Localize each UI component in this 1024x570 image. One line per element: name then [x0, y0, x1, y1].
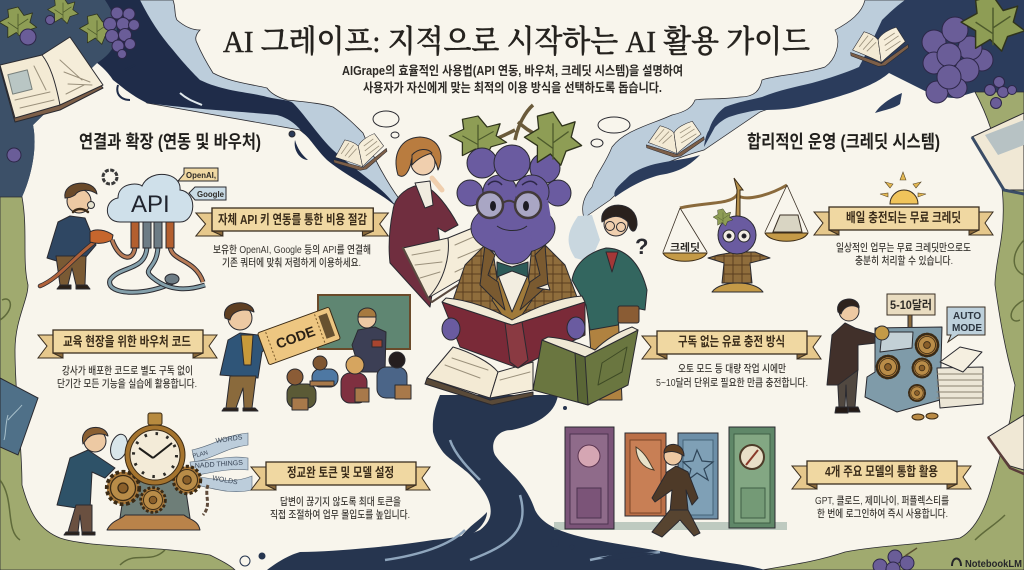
callout: OpenAI: [178, 168, 218, 181]
icon: young man with question: [572, 205, 647, 400]
icon: grape mascot head: [457, 145, 571, 264]
subtitle: AIGrape의 효율적인 사용법(API 연동, 바우처, 크레딧 시스템)을 설명하여: [342, 63, 683, 78]
banner: API key: 자체 API 키 연동를 통한 비용 절감: [218, 212, 367, 227]
icon: right leaf: [524, 112, 582, 165]
text block: tokens: 답변이 끊기지 않도록 최대 토큰을: [280, 495, 401, 508]
icon: ribbons of words: PLAN: [192, 450, 209, 460]
icon: red open book: [442, 296, 585, 368]
icon: small flying book left: [330, 132, 390, 175]
callout: auto mode: AUTO: [953, 311, 981, 322]
panel: left olive border: [0, 197, 235, 570]
icon: ribbons of words: [190, 433, 252, 492]
callout: auto mode: [947, 307, 985, 342]
text block: voucher code: 강사가 배포한 코드로 별도 구독 없이: [62, 364, 193, 377]
illustration: central characters: ?: [635, 234, 648, 259]
banner: API key: [196, 208, 388, 236]
icon: sun: [880, 172, 926, 204]
callout: 5-10 dollars sign: [887, 294, 935, 315]
callout: auto mode: MODE: [952, 323, 982, 334]
icon: API cables: [110, 222, 205, 292]
illustration: clock machine: [57, 413, 252, 535]
panel: central ink river: [240, 395, 765, 570]
icon: API cloud: API: [131, 191, 170, 218]
banner: daily free credit: [814, 207, 993, 235]
icon: coins: [912, 413, 938, 420]
illustration: paid charging machine: [827, 294, 985, 420]
illustration: scale with grape character: [663, 178, 808, 292]
icon: thought bubbles: [289, 111, 630, 147]
callout: Google: [189, 187, 226, 200]
icon: ribbons of words: WOLDS: [212, 475, 238, 486]
icon: lady reader: [389, 137, 458, 307]
icon: blue door: [678, 433, 718, 519]
illustration: central characters: [389, 105, 648, 405]
text block: paid charging: 5~10달러 단위로 필요한 만큼 충전합니다.: [656, 376, 808, 389]
icon: balance scale: [663, 178, 808, 262]
icon: OpenAI mark: [103, 170, 117, 184]
icon: ribbons of words: WORDS: [215, 434, 243, 445]
icon: ribbons of words: NADD THINGS: [195, 460, 243, 470]
icon: man with voucher: [220, 303, 270, 411]
text block: daily free credit: 일상적인 업무는 무료 크레딧만으로도: [836, 241, 971, 254]
icon: purple door: [565, 427, 614, 529]
text block: voucher code: 단기간 모든 기능을 실습에 활용합니다.: [57, 377, 197, 390]
icon: right-side book: [972, 113, 1024, 194]
icon: top-left grapes and leaves: [0, 0, 139, 59]
banner: paid charging: 구독 없는 유료 충전 방식: [678, 334, 785, 349]
icon: balance scale: 크레딧: [670, 241, 700, 254]
subtitle: [342, 63, 683, 95]
text block: tokens: 직접 조절하여 업무 몰입도를 높입니다.: [270, 508, 410, 521]
callout: Google: Google: [197, 189, 224, 199]
icon: man inserting coin: [827, 299, 878, 413]
banner: paid charging: [642, 331, 821, 359]
NotebookLM watermark: NotebookLM: [965, 559, 1022, 570]
banner: tokens and model settings: 정교완 토큰 및 모델 설정: [287, 465, 394, 480]
icon: walking man: [652, 444, 700, 537]
icon: gears: [107, 466, 201, 512]
heading: rational operation: 합리적인 운영 (크레딧 시스템): [747, 132, 940, 152]
icon: API cloud: [107, 174, 193, 222]
icon: plaid jacket: [453, 245, 577, 330]
icon: green open book: [533, 327, 638, 405]
icon: lower-right book: [988, 415, 1024, 474]
icon: loose grape: [7, 148, 21, 162]
icon: green door: [729, 427, 775, 528]
subtitle: 사용자가 자신에게 맞는 최적의 이용 방식을 선택하도록 돕습니다.: [363, 80, 662, 95]
illustration: API cloud and technician: [40, 168, 226, 292]
banner: daily free credit: 배일 충전되는 무료 크레딧: [846, 210, 961, 225]
icon: top-left open book: [0, 37, 103, 122]
text block: four models: [815, 495, 949, 520]
icon: lady book: [403, 225, 490, 302]
panel: top-right ink river border: [569, 0, 1024, 262]
icon: bottom grapes: [873, 548, 917, 570]
text block: API key: 보유한 OpenAI, Google 등의 API를 연결해: [213, 243, 371, 256]
icon: students at desks: [287, 352, 411, 410]
icon: CODE ticket: [257, 307, 341, 365]
icon: chain: [203, 485, 208, 515]
heading: connection and expansion: 연결과 확장 (연동 및 바우처): [79, 132, 261, 152]
banner: tokens and model settings: [251, 462, 430, 490]
icon: clock face: [125, 413, 185, 485]
icon: clock base: [107, 478, 200, 530]
text block: four models: 한 번에 로그인하여 즉시 사용합니다.: [817, 507, 948, 520]
icon: small grape character: [708, 209, 770, 292]
text block: API key: [213, 243, 371, 269]
icon: man with magnifier: [57, 427, 130, 535]
icon: man with plug: [40, 183, 113, 289]
icon: CODE ticket: CODE: [274, 323, 317, 352]
text block: voucher code: [57, 364, 197, 390]
text block: paid charging: [656, 362, 808, 389]
icon: bow tie: [497, 262, 528, 277]
icon: teacher: [352, 308, 386, 372]
icon: blackboard: [318, 295, 410, 349]
icon: small flying book right: [644, 120, 706, 161]
icon: grape stem and leaves: [449, 105, 538, 158]
text block: paid charging: 오토 모드 등 대량 작업 시에만: [678, 362, 786, 375]
banner: voucher code: 교육 현장을 위한 바우처 코드: [63, 334, 191, 349]
text block: daily free credit: 충분히 처리할 수 있습니다.: [855, 254, 953, 267]
icon: lower open book: [425, 347, 533, 405]
illustration: four doors: [554, 427, 787, 537]
icon: top-right grapes and leaf: [922, 0, 1024, 108]
callout: OpenAI: OpenAI,: [186, 170, 216, 180]
title: AI 그레이프: 지적으로 시작하는 AI 활용 가이드: [223, 24, 810, 59]
panel: right olive border: [762, 92, 1024, 570]
icon: lower-left blue book: [0, 378, 38, 455]
icon: charging machine: [865, 315, 942, 412]
icon: paper stack: [937, 347, 983, 408]
banner: four models: 4개 주요 모델의 통합 활용: [825, 464, 938, 479]
panel: top-left ink river border: [0, 0, 400, 205]
icon: floor strip: [554, 522, 787, 530]
text block: daily free credit: [836, 241, 971, 267]
text block: four models: GPT, 클로드, 제미나이, 퍼플렉스티를: [815, 495, 949, 507]
text block: API key: 기존 쿼터에 맞춰 저렴하게 이용하세요.: [222, 256, 361, 269]
illustration: voucher and classroom: [220, 295, 411, 411]
banner: four models: [792, 461, 971, 489]
callout: 5-10 dollars sign: 5-10달러: [890, 298, 932, 312]
text block: tokens: [270, 495, 410, 521]
banner: voucher code: [38, 330, 217, 358]
icon: small book top-right: [848, 26, 910, 70]
icon: orange door: [625, 433, 666, 516]
